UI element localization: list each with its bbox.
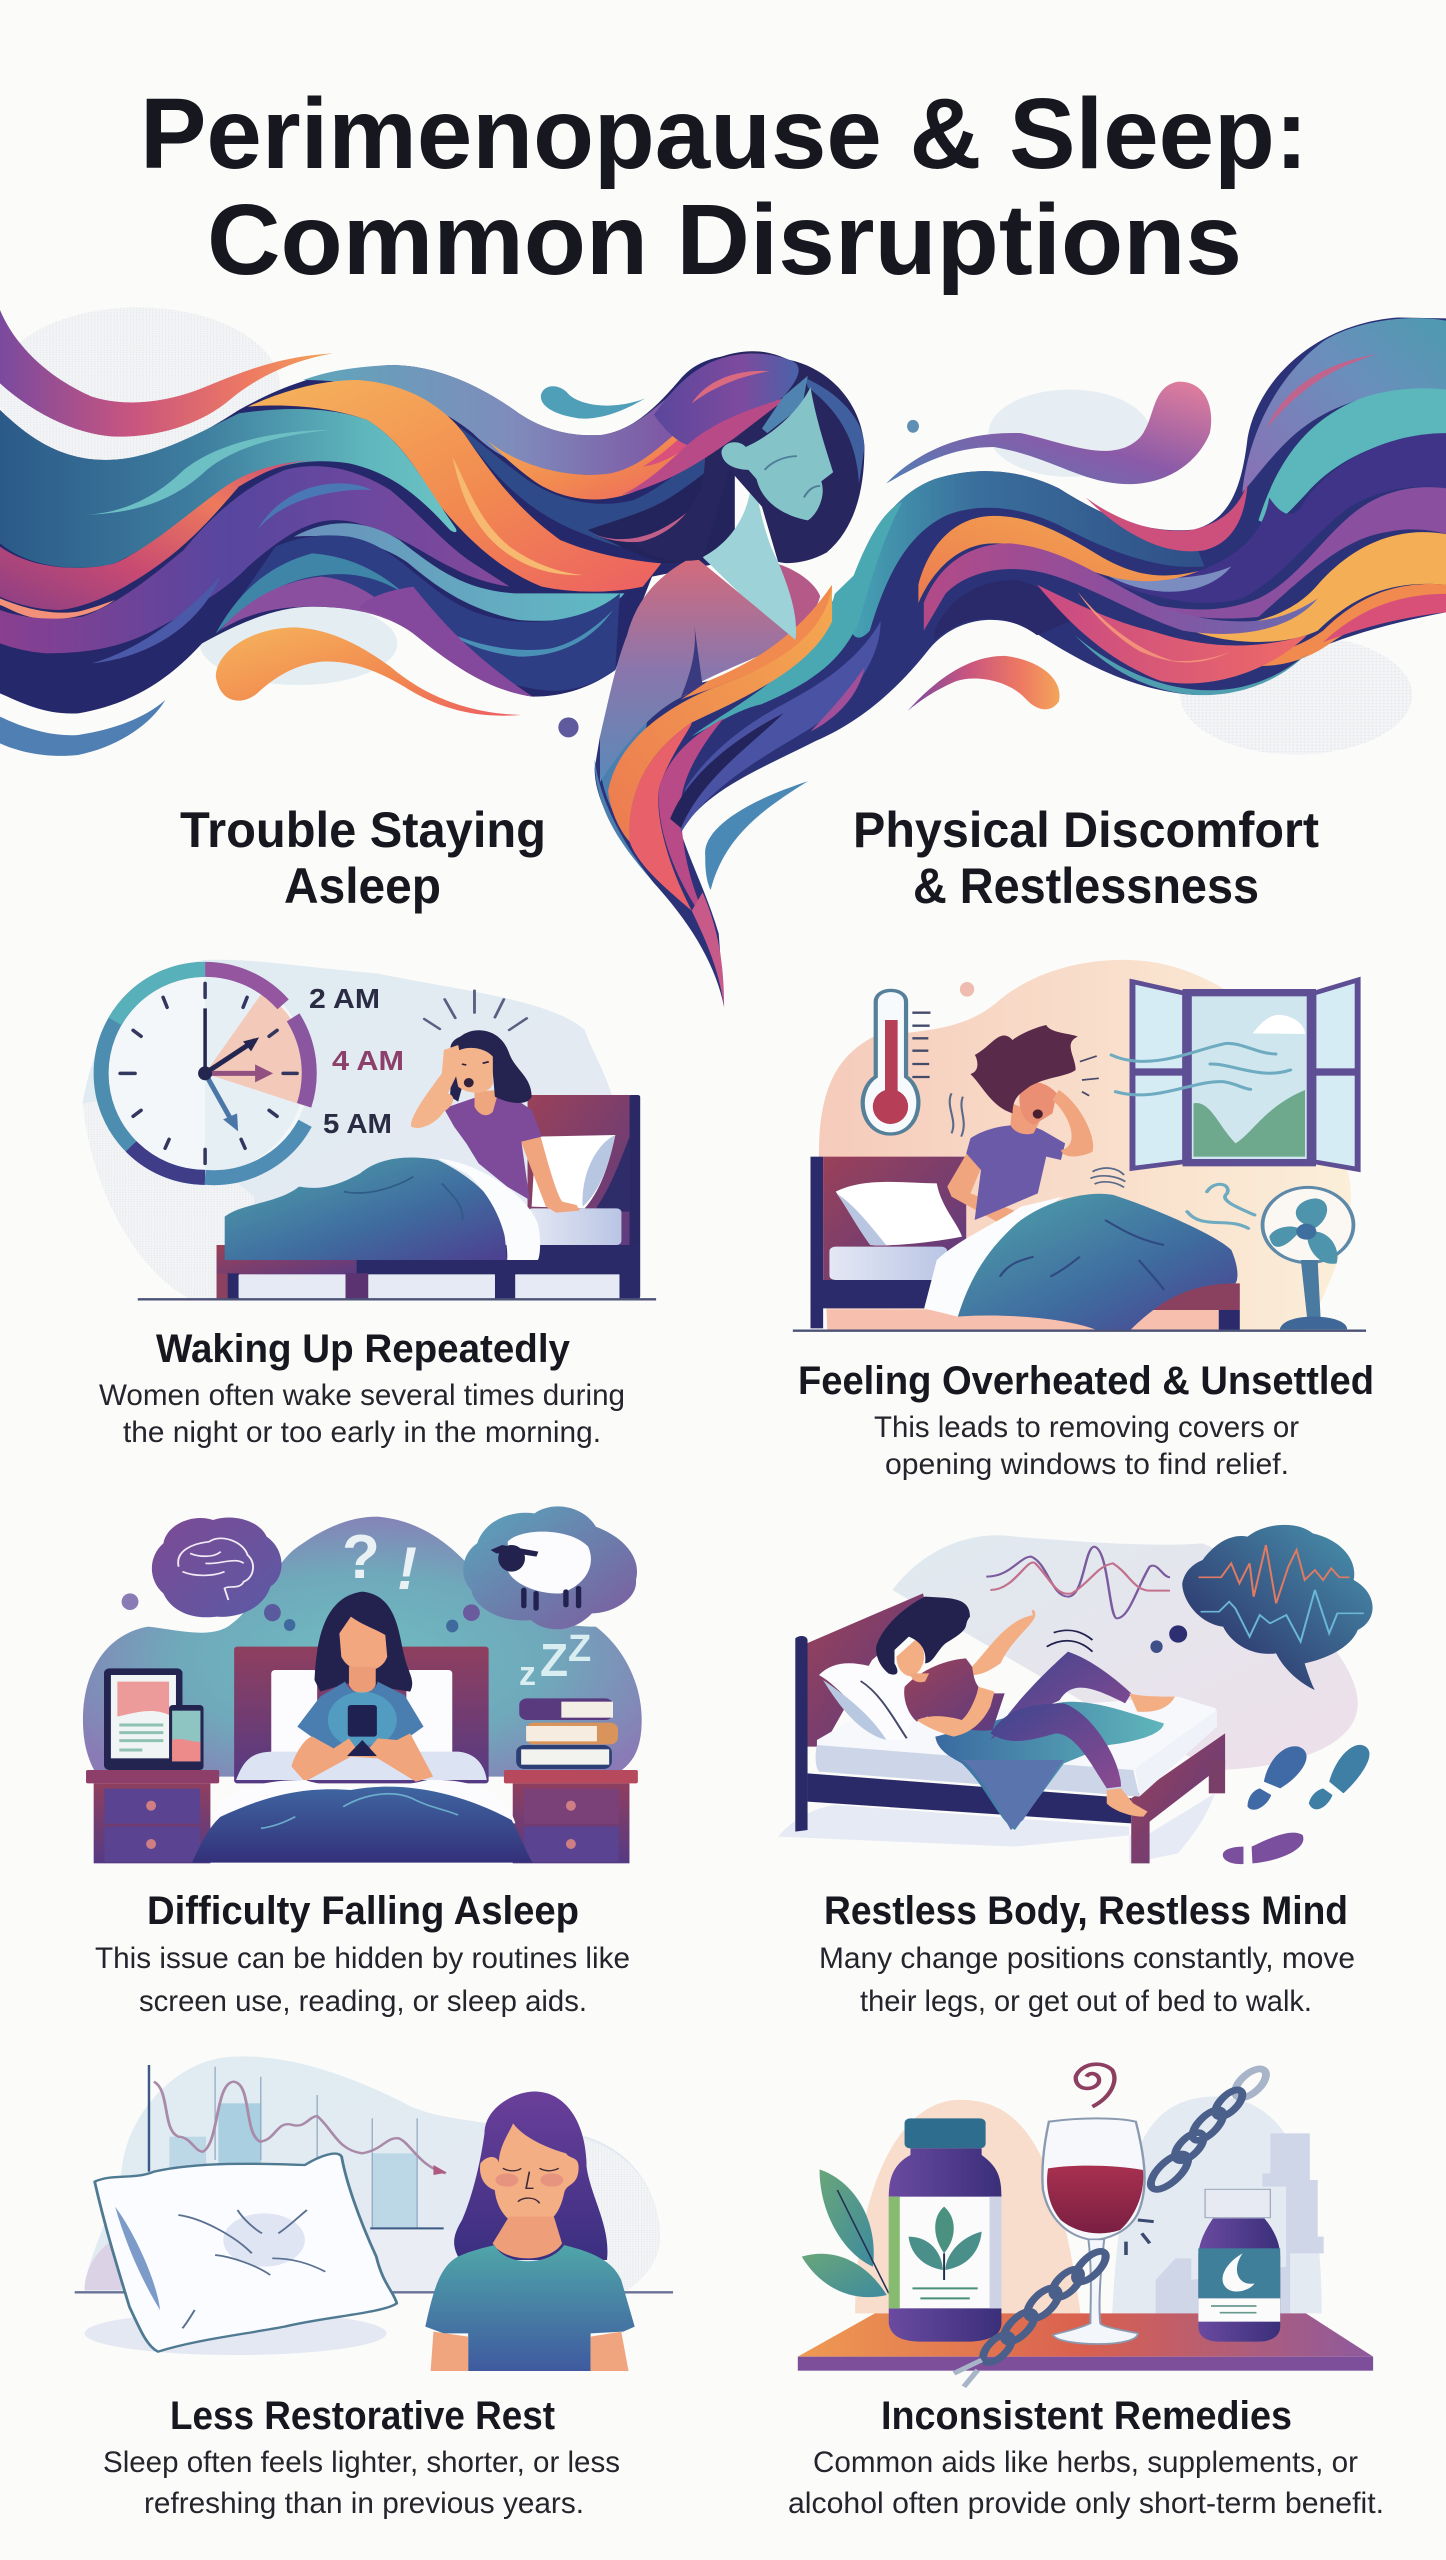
title xyxy=(140,78,1308,296)
section heading: left: Trouble Staying xyxy=(180,802,546,858)
spiral xyxy=(1076,2064,1114,2107)
hair flowing left xyxy=(0,307,735,756)
pillow xyxy=(819,1663,925,1740)
leaves xyxy=(820,2169,874,2267)
big bottle xyxy=(905,2118,986,2148)
pillow xyxy=(532,1135,615,1208)
description: refreshing than in previous years. xyxy=(144,2487,584,2520)
section heading: left: Asleep xyxy=(284,858,441,914)
woman, hair flowing right and lock xyxy=(595,317,1446,1007)
icons: question, exclamation and zzz: Z xyxy=(568,1628,591,1670)
description: screen use, reading, or sleep aids. xyxy=(139,1985,587,2018)
description xyxy=(819,1942,1355,2018)
heading: Inconsistent Remedies xyxy=(881,2394,1292,2438)
thought bubble xyxy=(1182,1525,1373,1690)
alarm lines xyxy=(424,991,527,1030)
icons: question, exclamation and zzz: ! xyxy=(397,1535,417,1602)
section heading: left xyxy=(180,802,546,914)
time labels: 2 AM xyxy=(309,983,380,1014)
wave xyxy=(986,1547,1170,1618)
heading: Feeling Overheated & Unsettled xyxy=(798,1359,1374,1403)
description xyxy=(103,2446,620,2520)
description xyxy=(95,1942,630,2018)
icons: question, exclamation and zzz: ? xyxy=(342,1523,380,1592)
description: This issue can be hidden by routines like xyxy=(95,1942,630,1975)
illustration: clock and woman in bed xyxy=(83,960,656,1299)
description: Many change positions constantly, move xyxy=(819,1942,1355,1975)
section heading: right xyxy=(853,802,1319,914)
wine glass xyxy=(1042,2118,1145,2240)
neck xyxy=(703,484,796,640)
panel: difficulty falling asleep xyxy=(83,1506,642,2018)
title: Common Disruptions xyxy=(207,184,1242,296)
heading: Less Restorative Rest xyxy=(170,2394,555,2438)
heading: Waking Up Repeatedly xyxy=(156,1327,571,1371)
description: their legs, or get out of bed to walk. xyxy=(860,1985,1312,2018)
time labels: 5 AM xyxy=(323,1108,392,1139)
illustration: supplement bottles, wine glass and broken chain xyxy=(798,2064,1373,2387)
pillows xyxy=(271,1670,317,1762)
description xyxy=(788,2446,1384,2520)
description xyxy=(99,1379,625,1449)
wind xyxy=(1111,1043,1290,1228)
illustration: pillow, sleep chart and tired woman xyxy=(75,2056,673,2371)
right hair mass xyxy=(595,317,1446,1007)
pillow xyxy=(84,2312,387,2355)
heading: Difficulty Falling Asleep xyxy=(147,1889,579,1933)
shelf xyxy=(798,2313,1373,2357)
hero illustration: woman with flowing hair xyxy=(0,307,1446,1007)
icons: question, exclamation and zzz xyxy=(342,1523,591,1693)
nightstands xyxy=(94,1783,210,1863)
icons: question, exclamation and zzz: z xyxy=(519,1655,536,1693)
mattress xyxy=(528,1208,621,1245)
bed xyxy=(807,1593,927,1747)
title: Perimenopause & Sleep: xyxy=(140,78,1308,190)
panel: feeling overheated xyxy=(793,960,1374,1481)
illustration: woman with phone in bed xyxy=(83,1506,642,1863)
books xyxy=(519,1698,613,1720)
clock xyxy=(101,969,309,1178)
description xyxy=(874,1411,1299,1481)
torso xyxy=(600,556,795,782)
thought cloud: sheep xyxy=(463,1506,637,1629)
description: Sleep often feels lighter, shorter, or less xyxy=(103,2446,620,2479)
woman xyxy=(972,1610,1035,1675)
thermometer xyxy=(863,990,918,1134)
tablet and phone xyxy=(104,1668,182,1770)
window xyxy=(1187,993,1311,1163)
footprints xyxy=(1248,1746,1307,1810)
headboard xyxy=(234,1647,489,1783)
description: alcohol often provide only short-term benefit. xyxy=(788,2487,1384,2520)
panel: waking up repeatedly xyxy=(83,960,656,1449)
fan xyxy=(1263,1187,1353,1263)
section heading: right: Physical Discomfort xyxy=(853,802,1319,858)
sheet and blanket xyxy=(924,1197,1063,1317)
panel: less restorative rest xyxy=(75,2056,673,2520)
illustration: restless woman on bed xyxy=(778,1525,1373,1864)
time labels xyxy=(309,983,404,1139)
headboard xyxy=(528,1095,638,1247)
description: This leads to removing covers or xyxy=(874,1411,1299,1444)
chain xyxy=(954,2064,1272,2387)
heading: Restless Body, Restless Mind xyxy=(824,1889,1348,1933)
icons: question, exclamation and zzz: Z xyxy=(540,1634,568,1686)
bed xyxy=(811,1157,823,1328)
bedding xyxy=(211,1780,515,1823)
description: the night or too early in the morning. xyxy=(123,1416,601,1449)
woman xyxy=(947,1143,1023,1223)
time labels: 4 AM xyxy=(332,1045,404,1076)
blanket xyxy=(935,1702,1164,1830)
woman xyxy=(314,1592,412,1692)
description: Women often wake several times during xyxy=(99,1379,625,1412)
panel: restless body xyxy=(778,1525,1373,2018)
bed frame xyxy=(356,1245,640,1274)
illustration: overheated woman, window and fan xyxy=(793,960,1366,1331)
blanket xyxy=(225,1158,507,1260)
panel: inconsistent remedies xyxy=(788,2064,1384,2520)
woman xyxy=(519,1133,580,1213)
pillow xyxy=(836,1182,962,1245)
woman xyxy=(454,2092,607,2260)
description: opening windows to find relief. xyxy=(885,1448,1289,1481)
section heading: right: & Restlessness xyxy=(913,858,1259,914)
small bottle xyxy=(1205,2189,1270,2218)
description: Common aids like herbs, supplements, or xyxy=(813,2446,1358,2479)
lock xyxy=(595,759,654,883)
thought cloud: brain xyxy=(152,1517,282,1617)
sleep chart xyxy=(169,2137,206,2173)
head hair xyxy=(632,351,864,563)
face xyxy=(721,387,833,520)
